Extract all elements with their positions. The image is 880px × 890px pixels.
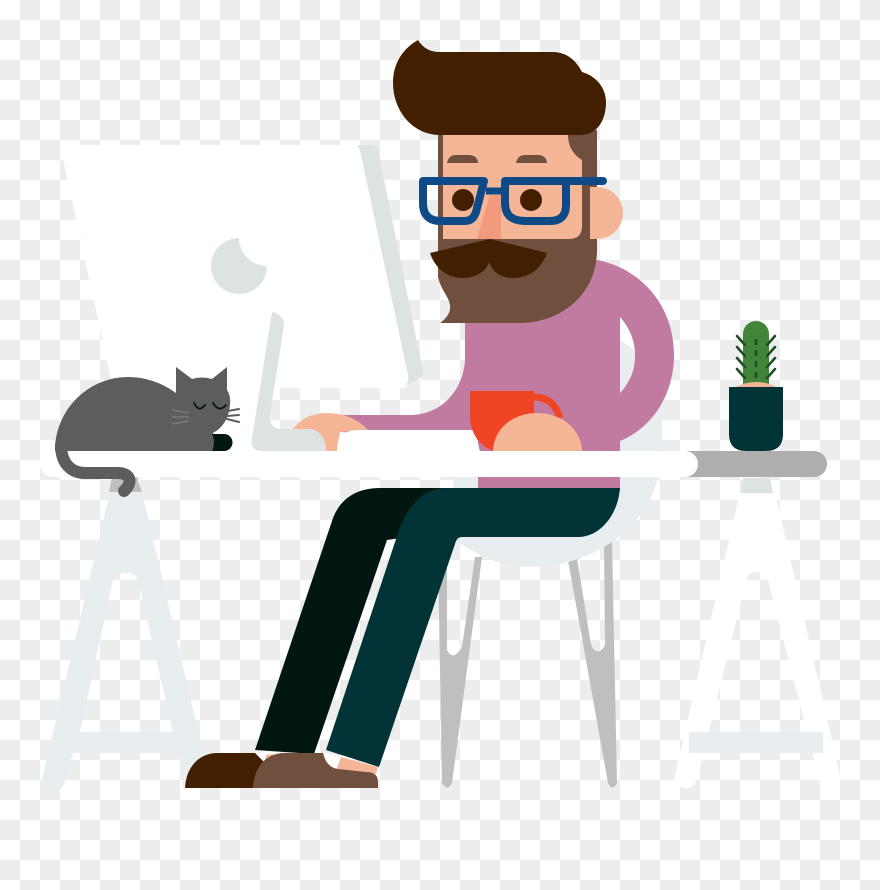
chair seat and back xyxy=(453,400,662,567)
keyboard xyxy=(337,430,480,452)
icon: apple logo xyxy=(211,238,267,294)
head xyxy=(393,40,623,323)
table top xyxy=(40,451,827,477)
nose xyxy=(477,195,501,239)
eyes xyxy=(452,189,542,211)
right hand xyxy=(493,413,582,452)
left trestle xyxy=(42,477,205,790)
front shoe and ankle xyxy=(253,752,378,788)
monitor stand xyxy=(252,312,326,451)
ear xyxy=(590,187,623,239)
right trestle xyxy=(674,478,840,790)
monitor xyxy=(60,145,423,451)
moustache xyxy=(430,239,547,278)
hair xyxy=(393,40,606,135)
face xyxy=(443,135,582,239)
chair legs xyxy=(438,540,617,788)
eyebrows xyxy=(447,155,547,163)
back leg xyxy=(255,488,470,754)
glasses xyxy=(423,181,603,221)
beard xyxy=(438,130,597,323)
cat xyxy=(55,367,239,491)
sweater xyxy=(340,260,674,489)
front leg xyxy=(326,488,620,767)
back shoe and ankle xyxy=(185,752,274,788)
left hand xyxy=(292,413,368,451)
coffee mug xyxy=(470,391,560,451)
cactus in pot xyxy=(729,321,783,451)
